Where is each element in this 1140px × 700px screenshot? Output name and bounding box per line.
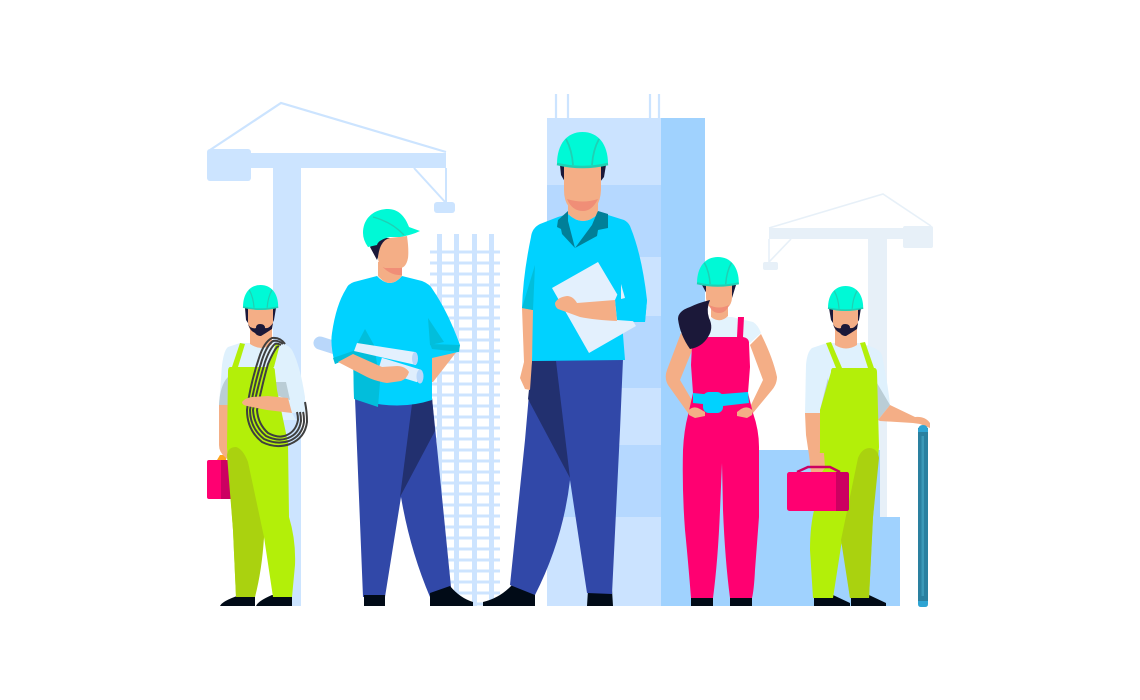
shoes (220, 595, 292, 606)
background: low building block (705, 450, 900, 606)
clipboard paper (552, 262, 636, 353)
hair ponytail (678, 300, 711, 349)
hand on toolbox (810, 453, 825, 472)
overalls (810, 342, 879, 598)
trousers (355, 398, 451, 597)
sleeve (615, 284, 647, 322)
shirt and left arm (219, 343, 305, 460)
t-shirt (680, 317, 761, 345)
neck and face (245, 306, 276, 348)
neck and face (370, 236, 408, 283)
back blueprint roll end (320, 343, 345, 351)
front blueprint roll (354, 343, 418, 365)
neck and face (560, 165, 606, 221)
arm across chest (555, 296, 617, 321)
background: central tower building (547, 94, 705, 606)
right forearm (430, 345, 458, 382)
background: small crane right (763, 194, 933, 525)
background: scaffold grid building (430, 234, 500, 606)
left arm (805, 413, 825, 472)
helmet (363, 209, 420, 247)
worker: left man with cable (207, 285, 307, 606)
belt (693, 392, 749, 413)
shoes (814, 595, 886, 606)
shoes (483, 585, 613, 606)
collar (557, 211, 608, 248)
back blueprint roll front part (380, 364, 424, 384)
neck and face (702, 285, 736, 320)
worker: woman in pink overalls (666, 257, 777, 606)
overalls (227, 343, 295, 597)
helmet (828, 286, 863, 311)
arm across body (242, 396, 292, 413)
worker: man with blueprints (320, 209, 473, 606)
shirt (805, 343, 890, 430)
neck and face (829, 306, 861, 348)
helmet (243, 285, 278, 310)
arms (666, 333, 777, 417)
shirt (331, 276, 460, 407)
shoes (691, 596, 752, 606)
toolbox (787, 467, 849, 511)
worker: central foreman (483, 132, 647, 606)
shirt (522, 214, 647, 361)
toolbox (207, 455, 231, 499)
worker: right man with pipe and toolbox (787, 286, 930, 607)
overalls (683, 317, 759, 598)
pipe (918, 425, 928, 607)
left arm (520, 308, 534, 390)
trousers (510, 359, 623, 595)
right arm (878, 405, 930, 428)
helmet (697, 257, 739, 287)
cable coil (247, 338, 307, 446)
arm holding rolls (338, 354, 409, 383)
beard (248, 323, 273, 336)
helmet (557, 132, 608, 168)
background: large crane left (207, 103, 455, 606)
shoes (364, 586, 473, 606)
hands (688, 407, 753, 418)
